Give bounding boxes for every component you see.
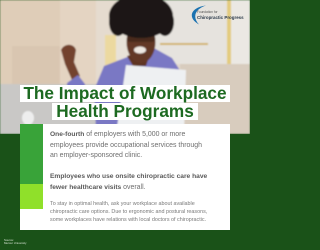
accent bar: lime bbox=[20, 184, 42, 209]
logo name: Chiropractic Progress bbox=[197, 15, 244, 20]
text block: advice: To stay in optimal health, ask your workplace about available bbox=[50, 201, 195, 207]
arm bbox=[61, 45, 80, 80]
source note bbox=[4, 238, 26, 245]
text block: employers statistic: employees provide occupational services through bbox=[50, 142, 202, 149]
text block: employers statistic bbox=[50, 130, 202, 159]
title bbox=[20, 83, 230, 121]
text block: advice: some workplaces have relations with local doctors of chiropractic. bbox=[50, 217, 206, 223]
logo: Foundation for Chiropractic Progress bbox=[192, 6, 244, 24]
text block: fewer visits: Employees who use onsite chiropractic care have bbox=[50, 173, 207, 180]
title line 2: Health Programs bbox=[56, 101, 194, 121]
sleeve bbox=[67, 75, 85, 90]
shirt bbox=[127, 48, 152, 66]
logo swoosh bbox=[192, 6, 206, 24]
hair bbox=[109, 0, 173, 38]
jacket bbox=[94, 47, 184, 130]
panel: white text card bbox=[20, 124, 230, 230]
source note: Source: bbox=[4, 238, 14, 242]
face bbox=[126, 21, 156, 63]
photo: woman celebrating in an office bbox=[0, 0, 250, 134]
source note: Mercer University bbox=[4, 241, 26, 245]
paper bbox=[116, 65, 186, 134]
text block: fewer visits bbox=[50, 173, 207, 191]
accent bar: green bbox=[20, 124, 42, 184]
text block: fewer visits: fewer healthcare visits overall. bbox=[50, 184, 146, 191]
text block: employers statistic: One-fourth of employers with 5,000 or more bbox=[50, 131, 185, 138]
text block: advice: chiropractic care options. Due to ergonomic and postural reasons, bbox=[50, 209, 207, 215]
text block: employers statistic: an employer-sponsored clinic. bbox=[50, 152, 142, 159]
logo text: Foundation for bbox=[197, 10, 218, 14]
text block: advice bbox=[50, 201, 207, 223]
title line 1: The Impact of Workplace bbox=[23, 83, 227, 103]
